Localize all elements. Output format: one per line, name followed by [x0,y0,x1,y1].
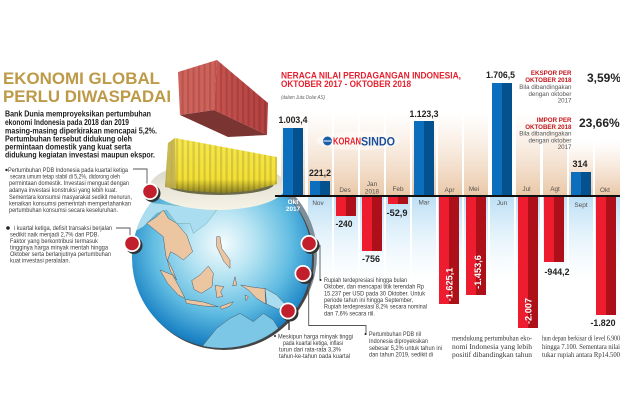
text block: rupiah: periode tahun ini hingga September, [324,297,413,304]
icon: red shipping container [178,60,268,137]
chart title: NERACA NILAI PERDAGANGAN INDONESIA, [281,70,461,80]
intro text: ekonomi Indonesia pada 2018 dan 2019 [5,117,129,127]
text block: current account: Faktor yang berkontribusi termasuk [10,238,99,245]
bar chart: positive bars [283,83,591,195]
month labels: Apr [445,187,455,194]
value labels: -944,2 [544,267,570,278]
text block: rupiah: Oktober, dan mencapai titik terendah Rp [324,284,424,290]
intro text: Pertumbuhan tersebut didukung oleh [5,134,132,144]
text block: current account: kuat investasi peralatan. [10,258,70,264]
text block: rupiah: 15.237 per USD pada 30 Oktober. Untuk [324,290,426,298]
month labels: Okt [600,187,610,194]
intro text [5,108,157,160]
text block: GDP third quarter: kenaikan konsumsi pemerintah mempertahankan [9,200,131,208]
intro text: Bank Dunia memproyeksikan pertumbuhan [5,108,151,118]
chart title: OKTOBER 2017 - OKTOBER 2018 [281,79,411,89]
logo: Koran Sindo: KORAN [333,136,361,148]
text block: inflation [274,334,353,360]
text block: GDP projection [364,331,442,358]
import callout [519,116,620,151]
value labels: 314 [572,159,588,170]
export callout: 2017 [558,98,572,104]
month labels: 2018 [365,188,380,196]
value labels: 1.003,4 [278,115,308,126]
text block: rupiah [320,277,427,318]
logo: Koran Sindo: SINDO [361,134,395,148]
text block: inflation: tahun-ke-tahun pada kuartal [279,353,350,360]
import callout: 2017 [558,144,572,151]
import callout: Bila dibandingakan [519,130,572,138]
text block: GDP third quarter: permintaan domestik. Investasi menguat dengan [9,180,129,187]
text block: GDP projection: dan tahun 2019, sedikit di [369,352,433,358]
turntable plate [150,162,286,210]
text block: inflation: pada kuartal ketiga, inflasi [283,340,343,347]
month labels: Feb [392,186,404,193]
callout leader lines [116,169,366,335]
import callout: IMPOR PER [537,117,572,124]
month labels: Nov [312,200,324,207]
chart column backgrounds [281,112,620,282]
month labels: Agt [550,186,560,193]
text block: current account [6,225,112,264]
article text column 1: nomi Indonesia yang lebih [452,344,533,351]
callout pins [124,183,320,322]
month labels: Sept [574,202,588,209]
intro text: didukung kegiatan investasi maupun ekspor. [5,150,155,160]
article text column 1: mendukung pertumbuhan eko- [452,336,533,342]
title: PERLU DIWASPADAI [3,88,171,106]
value labels: 221,2 [309,168,331,179]
text block: GDP third quarter: secara umum tetap stabil di 5,2%, didorong oleh [10,174,120,180]
text block: GDP projection: Pertumbuhan PDB riil [369,331,421,338]
article text column 1 [452,336,533,359]
text block: rupiah: dan 7,6% secara riil. [324,310,375,318]
rotated value labels: -1.453,6 [473,255,483,289]
text block: GDP projection: sebesar 5,2% untuk tahun ini [369,345,442,352]
text block: rupiah: Rupiah terdepresiasi 8,2% secara nominal [324,304,427,310]
month labels: Des [339,187,351,194]
value labels: 1.706,5 [486,70,516,81]
text block: current account: Oktober serta berlanjutnya pertumbuhan [10,251,111,258]
month labels: Jul [522,186,531,193]
text block: GDP projection: Indonesia diproyeksikan [369,338,428,345]
text block: inflation: Meskipun harga minyak tinggi [278,334,353,340]
map of Southeast Asia [136,202,284,348]
month labels: Mar [418,200,430,206]
article text column 2: tukar rupiah antara Rp14.500 [542,352,620,359]
chart title [281,70,461,89]
article text column 2 [542,336,620,359]
intro text: permintaan domestik yang kuat serta [5,142,131,152]
rotated value labels: -1.625,1 [444,268,454,301]
text block: rupiah: Rupiah terdepresiasi hingga bulan [324,277,407,284]
intro text: masing-masing diperkirakan mencapai 5,2%. [5,126,157,136]
rotated value labels [444,255,534,324]
text block: current account: tingginya harga minyak mentah hingga [10,244,108,252]
export callout: dengan oktober [528,91,572,98]
export callout [519,70,620,104]
value labels: -240 [336,219,352,230]
axis line [275,195,620,197]
text block: GDP third quarter: Pertumbuhan PDB Indonesia pada kuartal ketiga [8,167,128,174]
text block: current account: i kuartal ketiga, defisit transaksi berjalan [14,225,112,232]
chart unit note: (dalam Juta Dolar AS) [281,95,325,101]
value labels: 1.123,3 [410,109,438,120]
text block: GDP third quarter: pertumbuhan konsumsi secara keseluruhan. [9,207,118,214]
icon: yellow shipping container [165,138,277,193]
article text column 1: positif dibandingkan tahun [452,352,533,359]
text block: GDP third quarter: adanya investasi konstruksi yang lebih kuat. [9,187,117,194]
text block: GDP third quarter [5,167,132,214]
month labels [312,181,610,209]
import callout: 23,66% [579,116,620,130]
title: EKONOMI GLOBAL [3,70,160,88]
month labels: Jun [497,200,508,207]
import callout: dengan oktober [528,138,572,144]
month labels: Jan [367,181,378,188]
bar chart: negative bars [336,197,616,328]
text block: GDP third quarter: Sementara konsumsi masyarakat sedikit menurun, [9,194,132,201]
first column month label: 2017 [286,206,301,213]
value labels: -1.820 [590,318,616,329]
text block: current account: sedikit naik menjadi 2,7% dari PDB. [10,232,99,238]
export callout: EKSPOR PER [531,70,572,77]
value labels [278,70,616,329]
export callout: OKTOBER 2018 [525,77,572,84]
value labels: -52,9 [386,208,408,219]
globe [132,193,317,350]
title [3,70,171,106]
first column month label [286,199,301,213]
rotated value labels: -2.007 [524,298,534,324]
logo: Koran Sindo [316,132,400,150]
first column month label: Okt [288,199,299,206]
import callout: OKTOBER 2018 [525,124,572,131]
export callout: Bila dibandingakan [519,84,572,91]
text block: inflation: turun dari rata-rata 3,3% [279,346,341,354]
month labels: Mei [469,186,479,193]
value labels: -756 [362,254,380,265]
